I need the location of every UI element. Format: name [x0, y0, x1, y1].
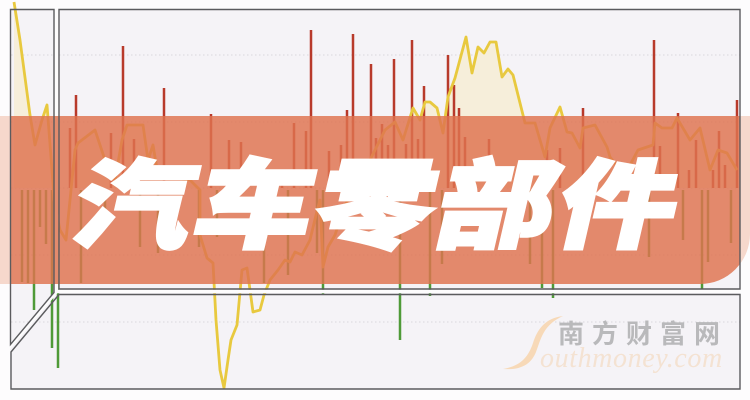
watermark Chinese name: 南方财富网	[558, 319, 728, 349]
dotted grid lines	[11, 55, 740, 322]
red up volume bars	[70, 30, 737, 188]
price line area fill	[14, 12, 561, 116]
icon: swoosh S	[503, 316, 563, 369]
watermark logo	[503, 316, 728, 374]
watermark URL: outhmoney.com	[540, 343, 723, 374]
title: 汽车零部件	[63, 153, 693, 261]
title band	[0, 116, 750, 284]
green down volume bars	[22, 190, 731, 368]
